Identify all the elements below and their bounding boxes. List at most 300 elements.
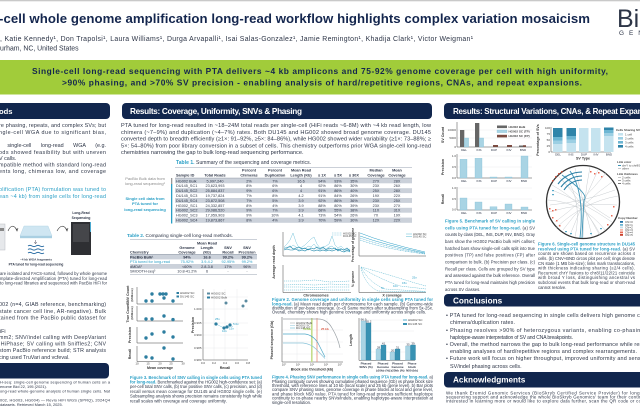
chart: phasing bars: DU145 SC [408,322,423,326]
chart: phased sequence curves: HG002 SC [296,324,311,328]
text: coverage summary: chimera (~7–9%) and duplication (~4–7%) rates. Both DU145 and HG002 showed broad genome coverage. DU145 [121,130,431,136]
text: samples [0,302,106,322]
chart: SV count by class: INV [506,148,512,152]
chart: subsampled coverage distribution: 10x [393,284,398,288]
table 2 rows: 3.9-4.2 [201,260,213,264]
figure 5 caption: comparison to bulk. (b) Precision per class. (c) [445,260,536,264]
chart: precision vs recall [191,289,250,370]
table 2 rows: PacBio Bulk¹ [130,255,153,259]
chart: precision vs recall: 5.0x [233,322,239,326]
legend: copy number: CN=0 [625,220,633,224]
table 2 header: Precision [238,250,256,254]
chart: total SNV count [126,285,195,304]
table 1 header: Mean Read [291,169,312,173]
table 1 side labels: PTA tuned for [132,201,158,206]
figure 2 caption: long-read. (a) Mean read depth per chromosome for each sample. (b) Genome-wide [272,301,434,306]
table 1 rows: 73% [318,214,326,218]
chart: precision vs recall: 0.4 [223,361,227,365]
chart: precision vs recall: 0.0 [201,361,205,365]
affiliation: urham, NC, United States [0,46,79,52]
chart: read depth per chromosome: HG002 SC [343,232,357,236]
figure 3 caption: recall versus mean coverage for DU145 and HG002 single cells. (e) [130,389,263,394]
table 1 header: Chimeras [240,174,258,178]
text: references: enome Biol 22, 195 (2021). [0,384,47,389]
chart: precision by class: 0.0 [452,176,456,180]
table 1 rows: 28X [394,179,401,183]
legend: cells sharing: Cells Sharing SV [616,128,640,132]
table 2 rows: 99.2% [242,255,253,259]
table 1 rows: 25X [373,189,380,193]
chart: phasing bars: ≥25kb (%) [391,368,404,372]
chart: true count: (Millions) [130,306,134,320]
table 1 rows: 25,884,837 [205,189,225,193]
chart: phasing bars: Phased [378,362,389,366]
figure 4: phasing charts [270,317,423,372]
table 1 rows: 8% [246,204,252,208]
table 1 rows: HG002_SC3 [176,214,198,218]
table 1 rows: 23,623,993 [205,184,225,188]
table 2 rows: dMDA² [130,265,142,269]
chart: subsampled coverage distribution: 25x [412,276,417,280]
table 1 rows: 22X [394,194,401,198]
figure 3 caption: per-cell total SNV calls, (b) true positive SNV calls, (c) precision, and (d) [130,384,263,389]
table 1 rows: 4.1 [298,214,304,218]
table 1 header: Median [369,169,383,173]
chart: subsampled coverage distribution: 5x [381,286,385,290]
chart: precision by class: 1.0 [452,154,456,158]
chart: precision vs recall: Recall [220,366,230,370]
table 1 rows: 2% [246,179,252,183]
table 1 header: Percent [242,169,257,173]
chart: precision vs recall: HG002 Bulk [211,296,228,300]
chart: recall by class: BND [521,211,528,215]
chart: precision by class [441,154,532,183]
heading: acknowledgments: Acknowledgments [453,376,526,384]
chart: coverage distribution: HG002 SC [413,232,427,236]
legend: cells sharing: 4 cells [625,144,634,148]
text: references: datasets. Retrieved March 15, 2025. [0,402,63,407]
table 1 header: Coverage [367,174,385,178]
icon: sequencer [71,222,91,255]
table 1 rows: 3.9 [298,219,304,223]
table 1 rows: 35% [350,179,358,183]
table 1 rows: 11X [373,209,380,213]
chart: SV sharing stacked bars: INV [593,152,599,156]
chart: recall by class: 0.5 [452,197,456,201]
figure 4 caption: Phasing contiguity curves showing cumulative phased sequence (Gb) vs phase block size [272,379,434,384]
table 1 rows: 86% [334,189,342,193]
table 2 rows: SMOOTH-seq³ [130,269,155,273]
chart: precision vs recall: 1.000 [194,307,202,311]
chart: precision by class: Precision [441,159,445,175]
table 1 rows: 8% [246,184,252,188]
table 1 rows: 7% [246,199,252,203]
chart: phased sequence curves: 10⁰ [282,362,287,366]
table 2 header: SNV [224,246,232,250]
chart: SV sharing stacked bars: INS [568,152,574,156]
table 1 header: ≥ 30X [349,174,359,178]
chart: phasing bars: 95.2 [366,320,372,324]
table 1 rows [176,179,401,223]
arrow: to plate [8,226,18,231]
figure 5 caption: PTA tuned for long-read maintains high precision [445,280,536,285]
table 1 side labels [124,176,172,224]
chart: read depth per chromosome: Average read depth [272,245,276,279]
text: coverage summary: 5×: 54–80%) from poor library conversion in a subset of cells. This chemistry outperforms prior WGA single-cell long-read [121,144,431,150]
chart: recall: 15 [146,362,150,366]
chart: phasing bars: Phase [408,362,417,366]
table 1 rows: 86% [334,184,342,188]
chart: precision vs recall: 25x [215,317,220,321]
table 1 rows: 23X [373,184,380,188]
text: coverage summary: converted depth to breadth efficiently (≥1×: 91–92%, ≥5×: 84–86%), while HG002 showed wider variability (≥1×: 73–88%; ≥ [121,136,431,142]
chart: precision vs recall: 0.985 [194,346,202,350]
text: samples: tained from the PacBio public dataset for [0,316,106,322]
figure 3 caption: for long-read. Benchmarked against the HG002 high-confidence set: (a) [130,380,263,384]
chart: recall: 25 [169,362,173,366]
table 1 rows: 26% [350,194,358,198]
legend: copy number: CN=3 [625,228,633,232]
table 1 rows: 55% [334,209,342,213]
chart: phased sequence curves: 10³ [324,362,328,366]
legend: link color: 2 cells [622,176,631,180]
legend: cells sharing: 1 cell [625,132,632,136]
text: analysis: HiPhase; SV calling with Sniffles2; CNV [0,342,106,348]
table 2 header: Mean Read [197,242,218,246]
chart: precision: Precision [128,327,132,343]
legend: link color [617,160,640,186]
table 1 rows: 31X [394,209,401,213]
legend: cells sharing [616,128,640,148]
table 1 rows: 70% [318,219,326,223]
table 1 rows: 59% [334,219,342,223]
chart: subsampled coverage distribution [351,265,426,298]
chart: subsampled coverage distribution: % genome [351,271,355,287]
label: fragments: ~4 kb WGA fragments [20,258,52,262]
chart: recall: 20 [158,362,162,366]
chart: phased sequence curves: 25 kb [321,327,329,331]
figure 5 caption: counts by class (DEL, INS, DUP, INV, BND). Gray [445,232,536,237]
text: coverage summary: chemistries narrowing the gap to bulk long-read sequencing performance. [121,150,304,156]
table 1 rows: 8% [272,194,278,198]
figure 2 caption: Figure 2. Genome coverage and uniformity in single cells using PTA tuned for [272,297,433,302]
figure 3: SNV scatter panels [126,285,250,370]
chart: SV count by class: SV Count [441,126,445,143]
table 1 rows: 93% [334,179,342,183]
chart: precision vs recall: 0.980 [194,358,202,362]
chart: SV sharing stacked bars: SV Type [576,156,590,160]
chart: recall by class [441,186,532,215]
text: background: re phasing, repeats, and complex SVs; but [0,123,106,129]
chart: circos plot [546,160,640,238]
table 1 rows: DU145_SC4 [176,199,197,203]
panel: acknowledgments [444,372,640,403]
table 1 rows: 40% [350,189,358,193]
table 1 rows: HG002_SC2 [176,209,198,213]
poster header [0,5,640,52]
chart: precision vs recall: 0.995 [194,321,202,325]
figure 6 caption: cannot resolve. [538,285,566,290]
chart: total SNV count: SNV Count [126,285,130,304]
table 1 rows: 91% [318,189,326,193]
chart: recall by class: Recall [441,194,445,204]
table 1 rows: 7% [272,179,278,183]
figure 2: genome coverage charts [272,228,427,298]
chart: phasing bars: 28 [377,346,380,350]
figure 2 caption: Overall, chemistry shows high genome coverage and uniformity across single cells. [272,310,426,315]
table 1 rows: 27X [373,179,380,183]
text: coverage summary [121,123,432,156]
chart: true count: True Count [126,303,130,322]
heading: methods [0,103,110,119]
figure 4 caption: Figure 4. Phasing SNV performance in single cells using PTA tuned for long-read. a) [272,375,434,380]
table 1 rows: 29,086,520 [205,209,225,213]
text: samples: state cancer cell line, AR-negative). Bulk [0,309,106,315]
legend: link color: 3 cells [622,178,631,182]
table 1 side labels: long-read sequencing¹ [125,181,166,186]
table 1 rows: 3.9 [298,209,304,213]
table 1 rows: 54% [334,214,342,218]
table 2 rows: 96% [243,265,251,269]
table 2 rows: 16.6 [203,255,211,259]
table 2 rows: <60% [182,265,193,269]
figure 2 caption [272,297,434,315]
chart: SV count by class: 10000 [448,128,456,132]
text: workflow description [0,271,108,286]
chart: phased sequence curves: DU145 SC [296,326,311,330]
chart: SV sharing stacked bars: BND [606,152,613,156]
table 1 rows: 4.2 [298,194,304,198]
panel: conclusions [444,294,640,370]
key message banner: >90% phasing, and >70% SV precision - enabling analysis of hard/repetitive regions, CNAs, and repeat expansions. [62,78,582,88]
chart: precision vs recall: 0.990 [194,333,202,337]
table 1 rows: 12X [373,219,380,223]
table 1 rows: 91% [318,194,326,198]
figure 6 caption: counts are shown based on recurrence across 4 [538,251,636,256]
chart: phased sequence curves: 10 kb [303,327,311,331]
heading: conclusions [444,294,640,306]
figure 5 caption: across SV classes. [445,287,480,292]
table 1 rows: 23X [373,204,380,208]
table 1 rows: 19,873,867 [205,219,225,223]
text: workflow description: are isolated and FACS-sorted, followed by whole genome [0,271,108,276]
text: background [0,123,106,175]
table 1 rows: 19X [394,214,401,218]
figure 4 caption: single-cell resolution. [272,400,311,405]
table 1 rows: 10% [271,214,279,218]
chart: SV sharing stacked bars: Percentage of SVs [536,124,540,156]
figure 4 caption: continuity to co-phase nearby SNVs/indels, enabling haplotype-aware interpretation at [272,396,434,401]
text: conclusions list: haplotype-aware interpretation of SV and CNA breakpoints. [450,335,573,341]
table 2 rows: PTA tuned for long-read [130,260,170,264]
chart: phased sequence curves: 10⁴ [338,362,343,366]
figure 3 caption [130,375,263,403]
panel: methods [0,103,111,407]
text: analysis: mm2; SNV/indel calling with DeepVariant [0,335,107,341]
figure 5 caption: Figure 5. Benchmark of SV calling in single [445,218,536,224]
chart: recall: 10 [135,362,139,366]
table 1 rows: 4 [300,184,302,188]
text: conclusions list: SV/indel phasing across cells. [450,364,522,370]
table 1 rows: 23X [373,199,380,203]
table 2 header: SNV [243,246,251,250]
table 1 rows: 9% [246,209,252,213]
figure 6 caption: resolved using PTA tuned for long-read. (a) SV [538,246,635,251]
chart: phased sequence curves: 10² [310,362,314,366]
chart: phasing bars: 31 [396,346,399,350]
chart: SV sharing stacked bars: 100 [545,126,550,130]
text: analysis: cing used TruVari and vcfeval. [0,355,70,361]
chart: phasing bars: Genome [377,365,389,369]
legend: cells sharing: 2 cells [625,136,634,140]
text: analysis: iFi [0,329,6,335]
table 2 rows: 75-92% [180,260,194,264]
table 1 header: ≥ 1X [318,174,326,178]
chart: precision by class: 0.5 [452,165,456,169]
figure 3 caption: recall scales with coverage and coverage uniformity. [130,398,227,403]
table 1 rows: 6% [272,189,278,193]
chart: phasing bars: 35 [406,342,410,346]
table 2 header: (Kb) [203,250,212,254]
heading: acknowledgments [444,372,640,388]
figure 4 caption: threshold, with reference lines at 10 kb (local scale) and 25 kb (gene level). b) Bar plots [272,383,433,388]
figure 6 caption: with broad Y loss, distinguishing ancestral vs [538,275,635,280]
chart: SV count by class [441,122,532,152]
table 2 rows: 2.8-3.8 [201,265,213,269]
legend: copy number: Copy Number [618,216,639,220]
chart: precision vs recall: 0.8 [246,361,250,365]
table 1 rows: 92% [318,199,326,203]
table 1 rows: 4 [300,189,302,193]
chart: true count [126,303,183,322]
figure 3 caption: Subsampling analysis shows precision remains consistently high while [130,394,263,399]
workflow diagram [0,211,91,266]
legend: link color: Link thickness [617,172,638,176]
table 1 rows: HG002_SC1 [176,204,198,208]
chart: SV count by class: BND [520,148,527,152]
table 1 [124,160,412,224]
table 1 rows: 7% [246,194,252,198]
heading: results structural [444,103,640,119]
text: background: ngle-cell WGA due to significant bias, [0,130,106,136]
table 1 header: Percent [268,169,283,173]
chart: SV sharing stacked bars [536,124,640,160]
chart: phased sequence curves [270,317,343,372]
legend: copy number: CN=2 [625,226,633,230]
table 2 rows: 6 [206,269,208,273]
figure 5 caption [445,218,536,292]
table 1 header: Sample ID [176,174,195,178]
table 1 header: Length (Kb) [290,174,312,178]
figure 2 caption: distribution of per-base coverage. (c–d) Same metrics after subsampling from 5x-25x. [272,306,433,310]
chart: precision by class: BND [521,179,528,183]
label: long-read sequencing: Sequencing [72,216,90,220]
chart: phasing bars [349,318,423,372]
table 1 rows: 5,997,240 [207,179,223,183]
table 1 rows: 38% [350,209,358,213]
table 2 rows: 92-95% [221,260,235,264]
heading: references [0,363,109,378]
chart: SV sharing stacked bars: 0 [548,150,550,154]
table 1 header: Coverage [388,174,406,178]
table 2 [127,233,257,275]
chart: recall by class: DUP [491,211,497,215]
figure 6 caption: Figure 6. Single-cell genome structure in DU145 [538,242,636,246]
logo: Bi [617,5,639,33]
chart: SV sharing stacked bars: 25 [547,144,550,148]
table 1 rows: 68% [318,209,326,213]
chart: SV count by class: DEL [461,148,467,152]
chart: subsampled coverage distribution: X coverage [382,294,402,298]
chart: phasing bars: SNVs (%) [359,365,373,369]
figure 6 caption: with thickness indicating sharing (≥2/4 cells). [538,266,635,271]
chart: subsampled depth: Chromosomes [303,294,329,298]
text: coverage summary: PTA tuned for long-read resulted in ~18–24M total reads per single-cell (HiFi reads ~6-8M) with ~4 kb read length, low [121,123,432,129]
chart: precision by class: DEL [461,179,467,183]
table 1 rows: 30% [350,184,358,188]
chart: total SNV count: (Millions) [130,288,134,302]
chart: recall: 30 [181,362,185,366]
text: workflow description: to long-read libraries and sequenced with PacBio HiFi for [0,280,108,286]
table 1 header: ≥ 5X [334,174,342,178]
text: samples: 002 (n=4, GIAB reference, benchmarking) [0,302,106,308]
chart: recall by class: 1.0 [452,186,456,190]
chart: precision vs recall: Precision [191,317,195,333]
text: analysis [0,329,107,361]
table 1 side labels: long-read sequencing [124,207,166,212]
table 1 rows: HG002_SC4 [176,219,198,223]
table 2 rows: 99.2% [223,255,234,259]
table 1 rows: 16.6 [297,179,305,183]
table 1 rows: 30% [350,219,358,223]
table 1 rows: 25X [394,199,401,203]
legend: link color: Link color [617,160,632,164]
text: references: ong-read whole-genome analysis of human single cells. Nat [0,388,111,394]
legend: link color: other [622,166,629,170]
text: conclusions list: chimera/duplication rates. [450,320,515,326]
chart: recall: Mean coverage [147,366,173,370]
key message banner: Single-cell long-read sequencing with PTA delivers ~4 kb amplicons and 75-92% genome coverage per cell with high uniformity, [32,66,608,76]
figure 5 caption: cells using PTA tuned for long-read. (a) SV [445,225,535,230]
table 2 header: Genome [179,246,195,250]
text: references [0,380,111,407]
table 1 rows: 19X [373,194,380,198]
heading: results coverage [122,103,432,119]
table 1 rows: 84% [334,194,342,198]
table 1 rows: 7X [374,214,379,218]
chart: read depth per chromosome [272,232,357,279]
authors: , Katie Kennedy¹, Don Trapolsi¹, Laura Williams¹, Durga Arvapalli¹, Isai Salas-Gonzalez¹, Jamie Remington¹, Khadija Clark¹, Victor Weigman¹ [0,36,474,43]
figure 5 caption: hatched bars show single-cell calls split into true [445,246,536,251]
chart: total SNV count: DU145 SC [180,294,195,298]
table 1 rows: 39% [350,204,358,208]
table 1 rows: 3.9 [298,204,304,208]
text: conclusions list [446,313,640,370]
label: long-read sequencing [72,211,90,220]
chart: phasing bars: Genome [391,365,404,369]
table 2 header: Coverage [178,250,196,254]
table 1 rows: 36% [350,199,358,203]
chart: precision vs recall: HG002 SC [211,292,226,296]
chart: coverage distribution: Percentage of genome [351,228,355,262]
heading: results coverage: Results: Coverage, Uniformity, SNVs & Phasing [130,107,302,116]
legend: copy number: CN=5 [625,233,633,237]
icon: instrument [0,224,5,250]
chart: coverage distribution: DU145 SC [413,234,426,238]
figure 3 caption: Figure 3. Benchmark of SNV calling in single cells using PTA tuned [130,375,262,380]
table 1 rows: 3.9 [298,199,304,203]
table 1 rows: 7% [272,209,278,213]
